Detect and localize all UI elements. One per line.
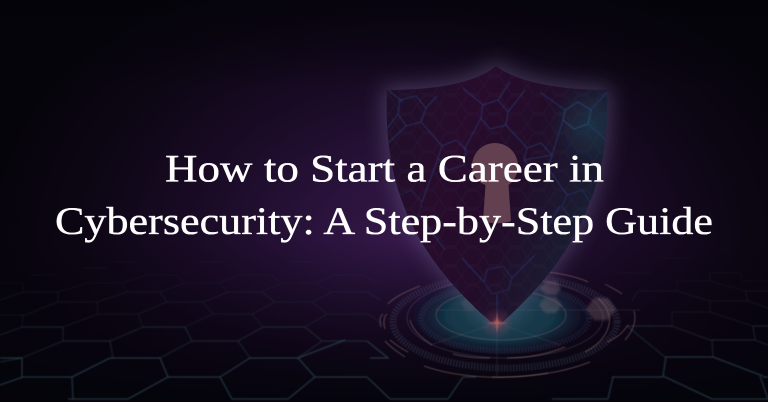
inner ring bbox=[436, 290, 566, 340]
shield circuit pattern bbox=[387, 82, 607, 318]
outer copper arcs bbox=[380, 272, 635, 377]
circular tech rings bbox=[380, 272, 640, 377]
binary ring bbox=[393, 276, 617, 368]
title bbox=[55, 148, 713, 243]
shield bbox=[386, 66, 608, 326]
floor: horizon rows bbox=[0, 258, 768, 292]
shield body bbox=[387, 66, 607, 327]
floor: near rows bbox=[0, 340, 768, 399]
keyhole bbox=[472, 143, 518, 223]
shield glow bbox=[383, 60, 611, 330]
title line 1: How to Start a Career in bbox=[165, 148, 604, 190]
radial lines bbox=[430, 310, 640, 376]
title line 2: Cybersecurity: A Step-by-Step Guide bbox=[55, 200, 713, 243]
teal disc bbox=[408, 278, 592, 354]
floor: middle rows bbox=[0, 326, 768, 362]
pale hexagon tiles bbox=[461, 281, 616, 320]
shield tip spark bbox=[481, 307, 513, 339]
hexagon floor grid bbox=[0, 258, 768, 399]
floor: far rows bbox=[0, 291, 768, 327]
